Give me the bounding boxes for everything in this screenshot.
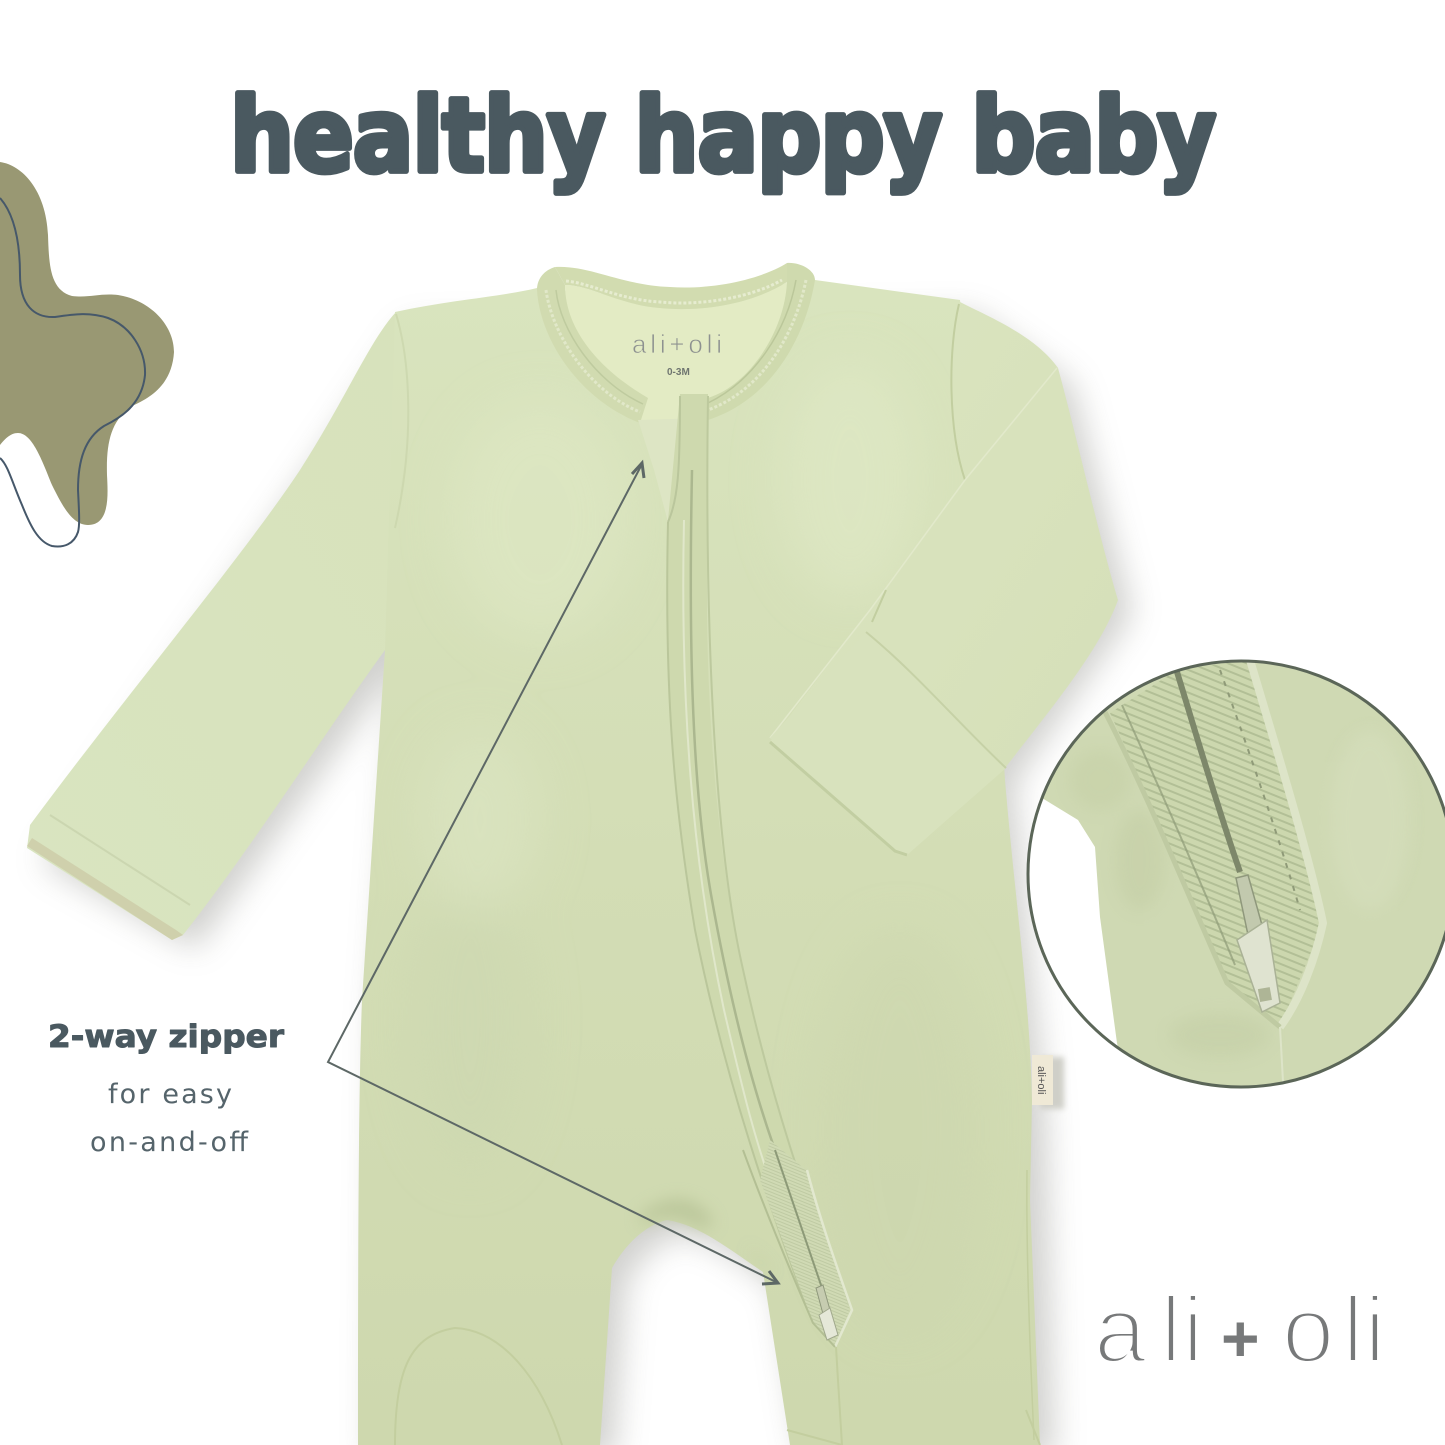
fabric shading <box>473 800 487 842</box>
romper <box>27 263 1118 1445</box>
brand logo: l <box>1342 1277 1363 1382</box>
callout text: 2-way zipper: for easy <box>108 1079 232 1110</box>
cuff <box>770 632 1006 855</box>
open zipper teeth <box>760 1140 850 1345</box>
size tag: ali+oli <box>1035 1066 1047 1094</box>
callout leader arrows <box>328 463 778 1284</box>
romper shadow <box>42 314 1132 1445</box>
size tag <box>1032 1055 1064 1109</box>
neck label text: ali+oli <box>632 329 722 359</box>
brand logo: a <box>1094 1277 1147 1382</box>
decorative blob <box>0 162 174 546</box>
title: healthy happy baby <box>230 75 1216 195</box>
neck opening <box>537 263 815 423</box>
sleeve seams <box>770 304 1057 738</box>
neck label text <box>634 334 720 375</box>
brand logo: i <box>1364 1277 1385 1382</box>
inset ring <box>1028 661 1445 1087</box>
brand logo: l <box>1160 1277 1181 1382</box>
collar stitching <box>546 280 806 412</box>
zipper detail inset <box>1020 650 1445 1100</box>
callout text: 2-way zipper <box>48 1019 285 1158</box>
inset background cut-out <box>1030 799 1118 1046</box>
brand logo: o <box>1282 1277 1334 1382</box>
zipper placket <box>638 394 852 1347</box>
left armhole crease <box>395 314 408 528</box>
neck label text: 0-3M <box>667 367 690 378</box>
zipper slider <box>816 1285 830 1314</box>
left collar ring <box>537 267 648 423</box>
seams on legs and feet <box>395 1170 1040 1445</box>
zipper pull <box>1236 875 1280 1012</box>
right collar ring <box>708 263 815 420</box>
crotch fold shading <box>644 1196 711 1234</box>
inset fabric mottling <box>1129 828 1142 892</box>
torso and legs <box>358 280 1040 1445</box>
back collar band <box>555 263 787 309</box>
right sleeve <box>960 302 1118 766</box>
brand logo: + <box>1221 1301 1260 1375</box>
callout text: 2-way zipper: on-and-off <box>90 1127 249 1158</box>
left sleeve <box>27 313 395 940</box>
zipper bands <box>1110 660 1323 1027</box>
callout text: 2-way zipper: 2-way zipper <box>48 1019 285 1055</box>
inset fabric <box>1043 662 1445 1086</box>
brand logo: i <box>1182 1277 1203 1382</box>
